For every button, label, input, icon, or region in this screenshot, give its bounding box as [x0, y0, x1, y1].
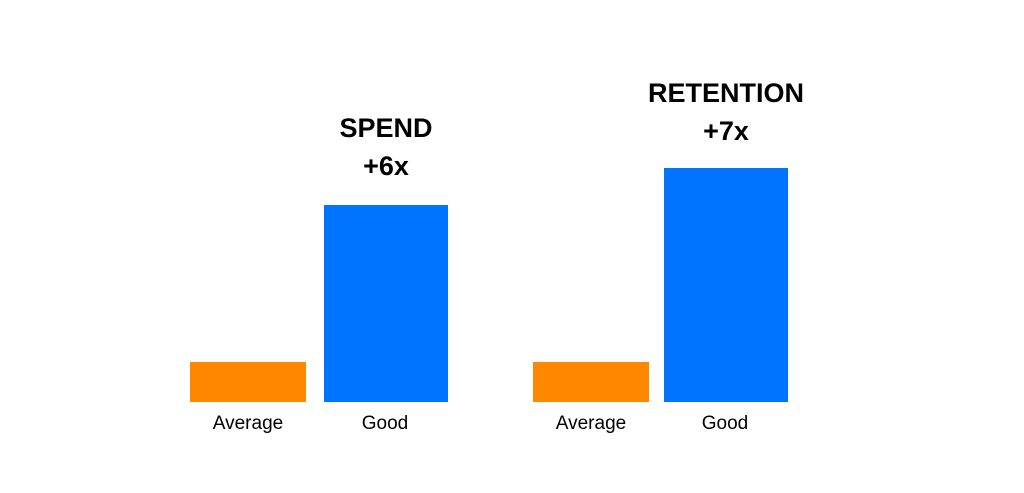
heading: spend: SPEND: [339, 113, 433, 143]
value: spend multiplier: +6x: [363, 151, 409, 181]
heading: retention: RETENTION: [648, 78, 804, 108]
label: spend good: Good: [362, 413, 408, 434]
bar: spend good: [324, 205, 448, 402]
bar: spend average: [190, 362, 306, 402]
label: spend average: Average: [213, 413, 283, 434]
bar: retention average: [533, 362, 649, 402]
bar: retention good: [664, 168, 788, 402]
label: retention good: Good: [702, 413, 748, 434]
chart: spend: [190, 113, 448, 434]
label: retention average: Average: [556, 413, 626, 434]
value: retention multiplier: +7x: [703, 116, 749, 146]
chart: retention: [533, 78, 804, 434]
